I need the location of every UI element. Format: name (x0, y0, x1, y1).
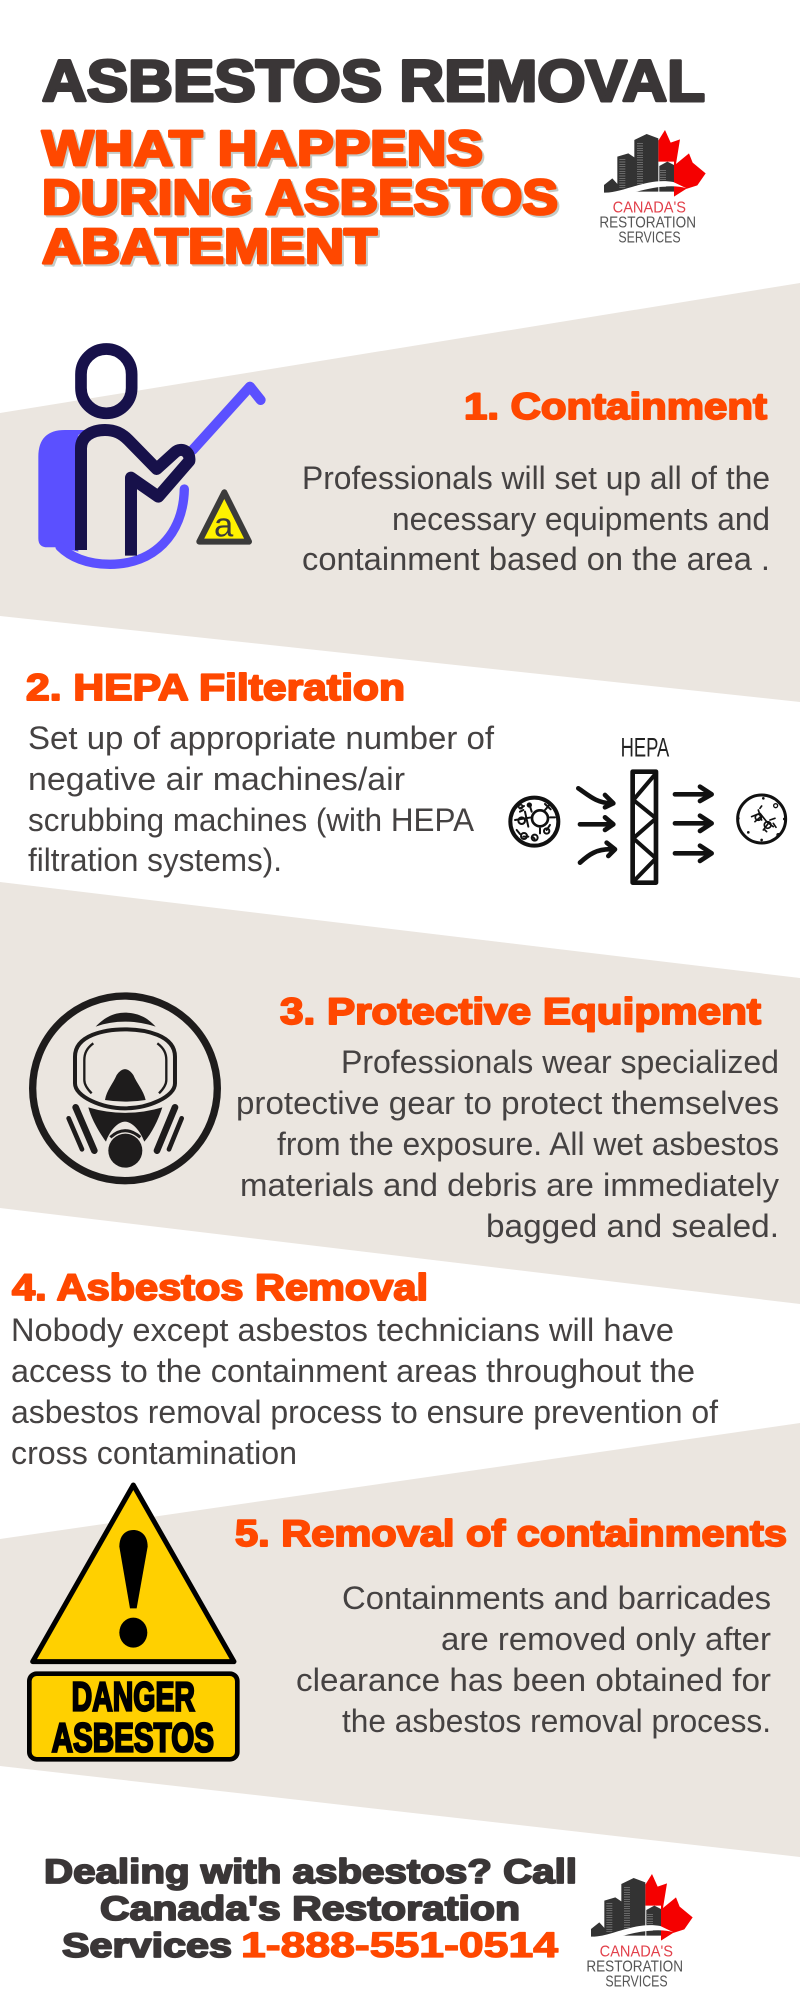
footer call to action: Canada's Restoration (100, 1890, 520, 1928)
heading: 3. Protective Equipment (280, 991, 761, 1032)
footer logo: Canada's Restoration Services (586, 1874, 693, 1991)
body text: filtration systems). (28, 842, 282, 878)
body text: containment based on the area . (302, 541, 770, 577)
icon: HEPA filter diagram: HEPA (621, 733, 669, 763)
footer call to action: Services (62, 1927, 232, 1965)
icon: danger asbestos sign: ASBESTOS (52, 1715, 214, 1761)
body text: access to the containment areas throughout the (11, 1353, 695, 1389)
subtitle: WHAT HAPPENS (42, 122, 483, 176)
header (42, 49, 706, 274)
body text: from the exposure. All wet asbestos (277, 1126, 779, 1162)
title: ASBESTOS REMOVAL (42, 49, 705, 114)
footer logo: Canada's Restoration Services: RESTORATION (586, 1959, 683, 1976)
body text (11, 1312, 718, 1471)
panel: asbestos removal (11, 1267, 718, 1471)
logo: Canada's Restoration Services (599, 130, 706, 247)
background band (0, 882, 800, 1304)
icon: HEPA filter diagram (510, 733, 786, 883)
body text: bagged and sealed. (486, 1208, 779, 1244)
icon: technician with sprayer (38, 349, 261, 564)
body text: Professionals will set up all of the (302, 460, 770, 496)
body text: negative air machines/air (28, 761, 405, 797)
icon: warning triangle: a (214, 506, 234, 544)
body text: scrubbing machines (with HEPA (28, 802, 475, 838)
body text: cross contamination (11, 1435, 297, 1471)
body text: Professionals wear specialized (341, 1044, 779, 1080)
body text: Nobody except asbestos technicians will have (11, 1312, 674, 1348)
body text: are removed only after (441, 1621, 771, 1657)
panel: removal of containments (29, 1485, 787, 1761)
body text (296, 1580, 771, 1739)
panel: HEPA filtration (26, 667, 786, 883)
panel: removal of containments background (0, 1423, 800, 1857)
icon: respirator mask (33, 996, 217, 1181)
body text: necessary equipments and (392, 501, 770, 537)
body text: materials and debris are immediately (240, 1167, 779, 1203)
body text: asbestos removal process to ensure prevention of (11, 1394, 718, 1430)
footer call to action (44, 1853, 577, 1965)
body text (28, 720, 494, 878)
logo: Canada's Restoration Services: CANADA'S (613, 200, 686, 217)
body text: the asbestos removal process. (342, 1703, 771, 1739)
icon: danger asbestos sign: DANGER (72, 1673, 195, 1719)
panel: protective equipment (0, 882, 800, 1304)
heading: 2. HEPA Filteration (26, 667, 405, 708)
body text (302, 460, 770, 577)
heading: 5. Removal of containments (235, 1513, 787, 1554)
footer call to action: 1-888-551-0514 (241, 1926, 559, 1965)
background band (0, 283, 800, 702)
panel: containment (0, 283, 800, 702)
body text: clearance has been obtained for (296, 1662, 771, 1698)
heading: 4. Asbestos Removal (12, 1267, 428, 1308)
body text: Containments and barricades (342, 1580, 771, 1616)
icon: clean air particle (738, 795, 786, 843)
body text (236, 1044, 779, 1244)
icon: warning triangle (199, 492, 249, 544)
subtitle (42, 122, 558, 274)
body text: protective gear to protect themselves (236, 1085, 779, 1121)
subtitle: ABATEMENT (42, 220, 377, 274)
footer logo: Canada's Restoration Services: SERVICES (605, 1974, 668, 1991)
footer call to action: Dealing with asbestos? Call (44, 1853, 577, 1891)
icon: contaminated air particle (510, 798, 558, 846)
footer logo: Canada's Restoration Services: CANADA'S (600, 1944, 673, 1961)
logo: Canada's Restoration Services: RESTORATION (599, 215, 696, 232)
subtitle: DURING ASBESTOS (42, 171, 558, 225)
heading: 1. Containment (464, 386, 767, 427)
body text: Set up of appropriate number of (28, 720, 494, 756)
logo: Canada's Restoration Services: SERVICES (618, 230, 681, 247)
icon: danger asbestos sign (29, 1485, 237, 1761)
